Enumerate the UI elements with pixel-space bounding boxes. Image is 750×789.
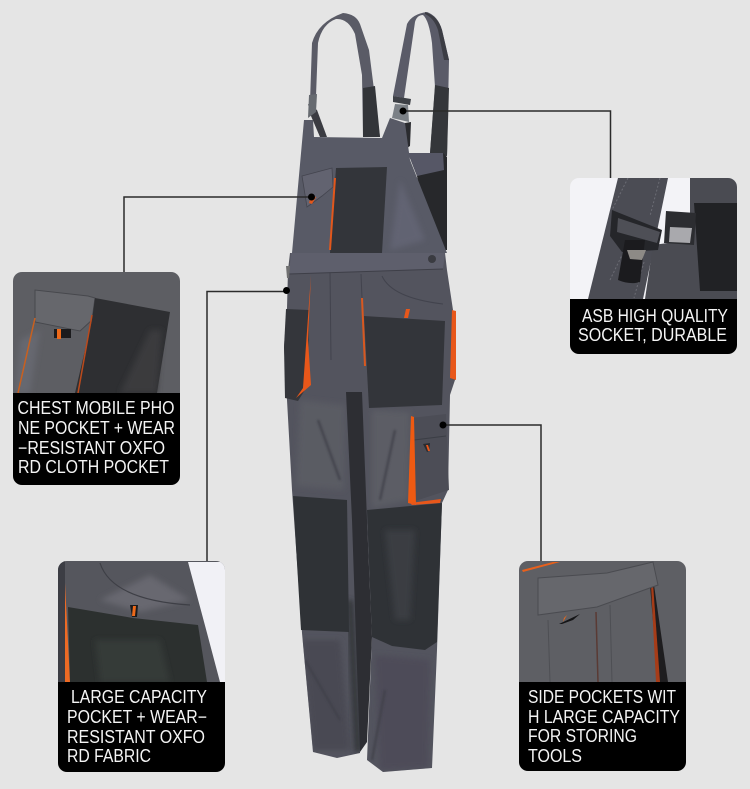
caption text: RD CLOTH POCKET — [18, 457, 169, 477]
caption text — [528, 687, 680, 766]
leader line: socket — [400, 108, 610, 190]
front pocket seams — [330, 272, 443, 360]
left knee patch — [293, 496, 349, 632]
front bib — [292, 118, 447, 253]
caption text: −RESISTANT OXFO — [18, 438, 165, 458]
caption text: TOOLS — [528, 746, 582, 766]
leader line: side pocket — [440, 422, 541, 572]
right front mesh pocket — [364, 316, 445, 408]
left shoulder strap — [308, 13, 380, 137]
caption text: NE POCKET + WEAR — [18, 418, 175, 438]
mesh chest pocket — [330, 167, 387, 253]
caption bar — [13, 393, 180, 485]
gap shadow between legs — [346, 392, 372, 752]
caption text: FOR STORING — [528, 726, 637, 746]
fly orange trim — [361, 298, 366, 366]
leader line: chest pocket — [124, 194, 315, 284]
caption text: ASB HIGH QUALITY — [582, 306, 728, 326]
waistband — [289, 253, 445, 274]
chest pocket flap — [302, 168, 333, 207]
panel: side pocket — [519, 561, 686, 771]
right side orange trim — [450, 310, 456, 380]
fabric folds — [296, 400, 430, 770]
caption text: CHEST MOBILE PHO — [18, 398, 174, 418]
caption text — [578, 309, 728, 344]
caption text: RD FABRIC — [67, 746, 151, 766]
lower body and legs — [284, 253, 456, 772]
photo: large pocket — [58, 561, 225, 682]
left leg hip pocket — [284, 309, 309, 401]
bib highlight — [390, 180, 425, 250]
knee patch sheen — [385, 530, 415, 620]
caption text: RESISTANT OXFO — [67, 727, 205, 747]
caption text: H LARGE CAPACITY — [528, 707, 680, 727]
right knee patch — [367, 503, 442, 650]
photo: side pocket — [519, 561, 686, 682]
caption text: POCKET + WEAR− — [67, 707, 207, 727]
photo: socket buckle — [570, 178, 737, 299]
caption text: SIDE POCKETS WIT — [528, 687, 676, 707]
caption text: SOCKET, DURABLE — [578, 325, 727, 345]
panel: socket — [570, 178, 737, 354]
caption text — [18, 398, 175, 477]
caption bar — [58, 682, 225, 772]
caption bar — [570, 299, 737, 354]
panel: large pocket — [58, 561, 225, 772]
side buckle — [286, 266, 290, 278]
left orange trim — [296, 275, 311, 398]
photo: chest pocket — [13, 272, 180, 393]
caption text — [67, 687, 207, 766]
rear bib panel — [408, 153, 447, 250]
caption text: LARGE CAPACITY — [71, 687, 207, 707]
product: bib overalls — [284, 12, 456, 772]
leader line: large pocket — [207, 287, 290, 570]
caption bar — [519, 682, 686, 771]
thigh cargo pocket — [408, 414, 449, 505]
panel: chest pocket — [13, 272, 180, 485]
right shoulder strap — [392, 12, 449, 156]
